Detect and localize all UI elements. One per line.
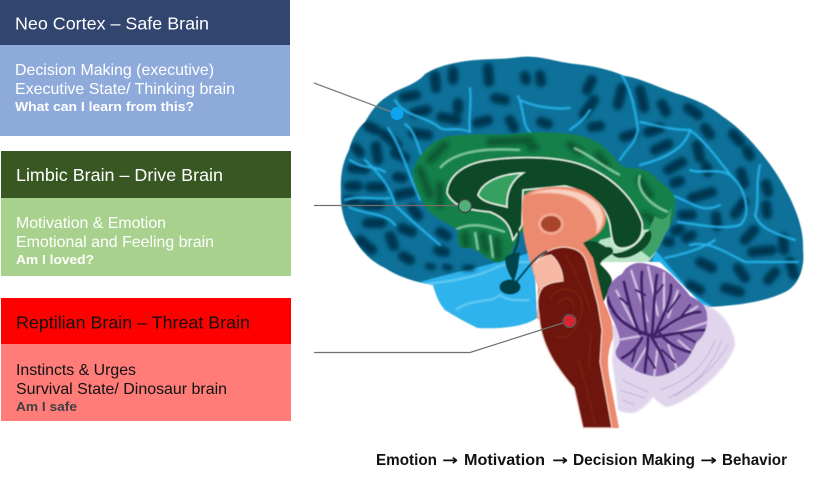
cerebellum purple: [607, 263, 707, 376]
panel: limbic brain: [1, 151, 291, 276]
caption: emotion to behavior flow: Decision Making: [573, 452, 695, 469]
heading: neo cortex: Neo Cortex – Safe Brain: [15, 14, 209, 34]
corpus callosum dark band: [447, 158, 642, 248]
text: limbic brain description: Motivation & Emotion: [16, 215, 166, 232]
caption: emotion to behavior flow: Motivation: [464, 452, 545, 469]
panel body: reptilian brain: [1, 344, 291, 421]
heading: reptilian brain: Reptilian Brain – Threat Brain: [16, 312, 250, 332]
panel body: limbic brain: [1, 198, 291, 276]
text: neo cortex description: Decision Making (executive): [15, 62, 214, 79]
leader line: limbic brain: [314, 200, 472, 212]
marker: reptilian brain: [563, 314, 576, 328]
brain illustration: [330, 50, 810, 428]
cerebellum: [607, 263, 735, 413]
text: neo cortex description: [15, 62, 235, 114]
brainstem: [536, 247, 612, 428]
leader line: neo cortex: [314, 83, 404, 120]
panel header: limbic brain: [1, 151, 291, 198]
fornix: [478, 173, 523, 207]
panel: neo cortex: [0, 0, 290, 136]
temporal light blue area: [420, 253, 538, 328]
text: neo cortex description: What can I learn from this?: [15, 99, 194, 114]
caption: emotion to behavior flow: Emotion: [376, 452, 437, 469]
text: limbic brain description: [16, 215, 214, 267]
text: neo cortex description: Executive State/ Thinking brain: [15, 81, 235, 98]
heading: limbic brain: Limbic Brain – Drive Brain: [16, 165, 223, 185]
salmon inner hole: [538, 213, 564, 235]
dark gyri: [348, 68, 794, 292]
caption: emotion to behavior flow: [376, 451, 787, 469]
caption: emotion to behavior flow: →: [552, 451, 568, 469]
panel header: reptilian brain: [1, 298, 291, 344]
text: reptilian brain description: Am I safe: [16, 399, 77, 414]
caption: emotion to behavior flow: →: [700, 451, 717, 469]
dark green crescent: [613, 231, 651, 257]
neocortex region: [330, 50, 810, 335]
teal pituitary: [500, 230, 547, 294]
dark green cluster: [583, 241, 613, 303]
caption: emotion to behavior flow: →: [442, 451, 458, 469]
panel body: neo cortex: [0, 45, 290, 136]
text: reptilian brain description: [16, 362, 227, 414]
limbic region: [412, 132, 676, 264]
marker: neo cortex: [390, 107, 404, 120]
caption: emotion to behavior flow: Behavior: [722, 452, 787, 469]
text: limbic brain description: Am I loved?: [16, 252, 94, 267]
marker: limbic brain: [458, 200, 472, 212]
text: reptilian brain description: Instincts & Urges: [16, 362, 136, 379]
light green lower fill: [598, 228, 670, 263]
light purple outer: [612, 304, 735, 413]
salmon light pons top: [533, 255, 562, 290]
panel header: neo cortex: [0, 0, 290, 45]
leader line: reptilian brain: [314, 314, 576, 352]
text: limbic brain description: Emotional and Feeling brain: [16, 234, 214, 251]
panel: reptilian brain: [1, 298, 291, 421]
text: reptilian brain description: Survival State/ Dinosaur brain: [16, 381, 227, 398]
midbrain salmon: [522, 187, 619, 428]
bright sulci: [345, 72, 798, 262]
